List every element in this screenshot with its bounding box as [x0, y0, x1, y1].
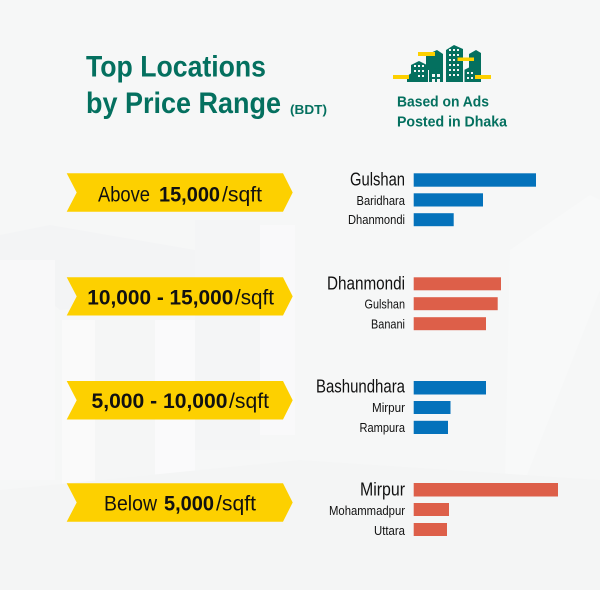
bar chart: below 5,000: [329, 480, 558, 538]
panel: 10,000 - 15,000: [67, 274, 501, 332]
bar chart: below 5,000: Mirpur: [360, 480, 405, 500]
bar chart: 10,000 - 15,000: Dhanmondi: [327, 274, 405, 294]
icon: city skyline: [393, 45, 491, 82]
title: by Price Range: [86, 87, 281, 120]
banner: 5,000 - 10,000: /sqft: [229, 390, 269, 413]
title: (BDT): [290, 102, 327, 117]
subtitle: Based on Ads: [397, 94, 489, 111]
banner: 10,000 - 15,000: [67, 277, 293, 316]
banner: 10,000 - 15,000: /sqft: [235, 286, 274, 309]
bar chart: 10,000 - 15,000: Banani: [371, 318, 405, 332]
subtitle: Posted in Dhaka: [397, 114, 508, 131]
title: Top Locations: [86, 50, 266, 84]
bar chart: 5,000 - 10,000: [316, 376, 486, 435]
banner: below 5,000: /sqft: [216, 492, 256, 516]
banner: above 15,000: [67, 173, 293, 212]
banner: below 5,000: [67, 483, 293, 522]
subtitle: [397, 94, 508, 131]
bar chart: 10,000 - 15,000: Gulshan: [364, 298, 405, 312]
bar chart: 10,000 - 15,000: [327, 274, 501, 332]
banner: 5,000 - 10,000: [67, 381, 293, 420]
bar chart: above 15,000: [348, 170, 536, 227]
banner: above 15,000: 15,000: [159, 184, 220, 206]
banner: below 5,000: 5,000: [164, 492, 214, 516]
bar chart: 5,000 - 10,000: Rampura: [360, 421, 405, 435]
bar chart: above 15,000: Gulshan: [350, 170, 405, 190]
banner: below 5,000: Below: [104, 492, 158, 516]
banner: above 15,000: Above: [98, 184, 150, 206]
banner: above 15,000: /sqft: [222, 184, 262, 206]
bar chart: above 15,000: Dhanmondi: [348, 213, 405, 227]
panel: 5,000 - 10,000: [67, 376, 486, 435]
title: [86, 50, 327, 120]
bar chart: below 5,000: Uttara: [374, 524, 405, 538]
bar chart: 5,000 - 10,000: Bashundhara: [316, 376, 406, 396]
bar chart: above 15,000: Baridhara: [356, 194, 405, 208]
bar chart: below 5,000: Mohammadpur: [329, 504, 405, 518]
banner: 10,000 - 15,000: 10,000 - 15,000: [87, 286, 233, 309]
panel: below 5,000: [67, 480, 558, 538]
bar chart: 5,000 - 10,000: Mirpur: [372, 401, 405, 415]
banner: 5,000 - 10,000: 5,000 - 10,000: [92, 390, 228, 413]
panel: above 15,000: [67, 170, 536, 227]
